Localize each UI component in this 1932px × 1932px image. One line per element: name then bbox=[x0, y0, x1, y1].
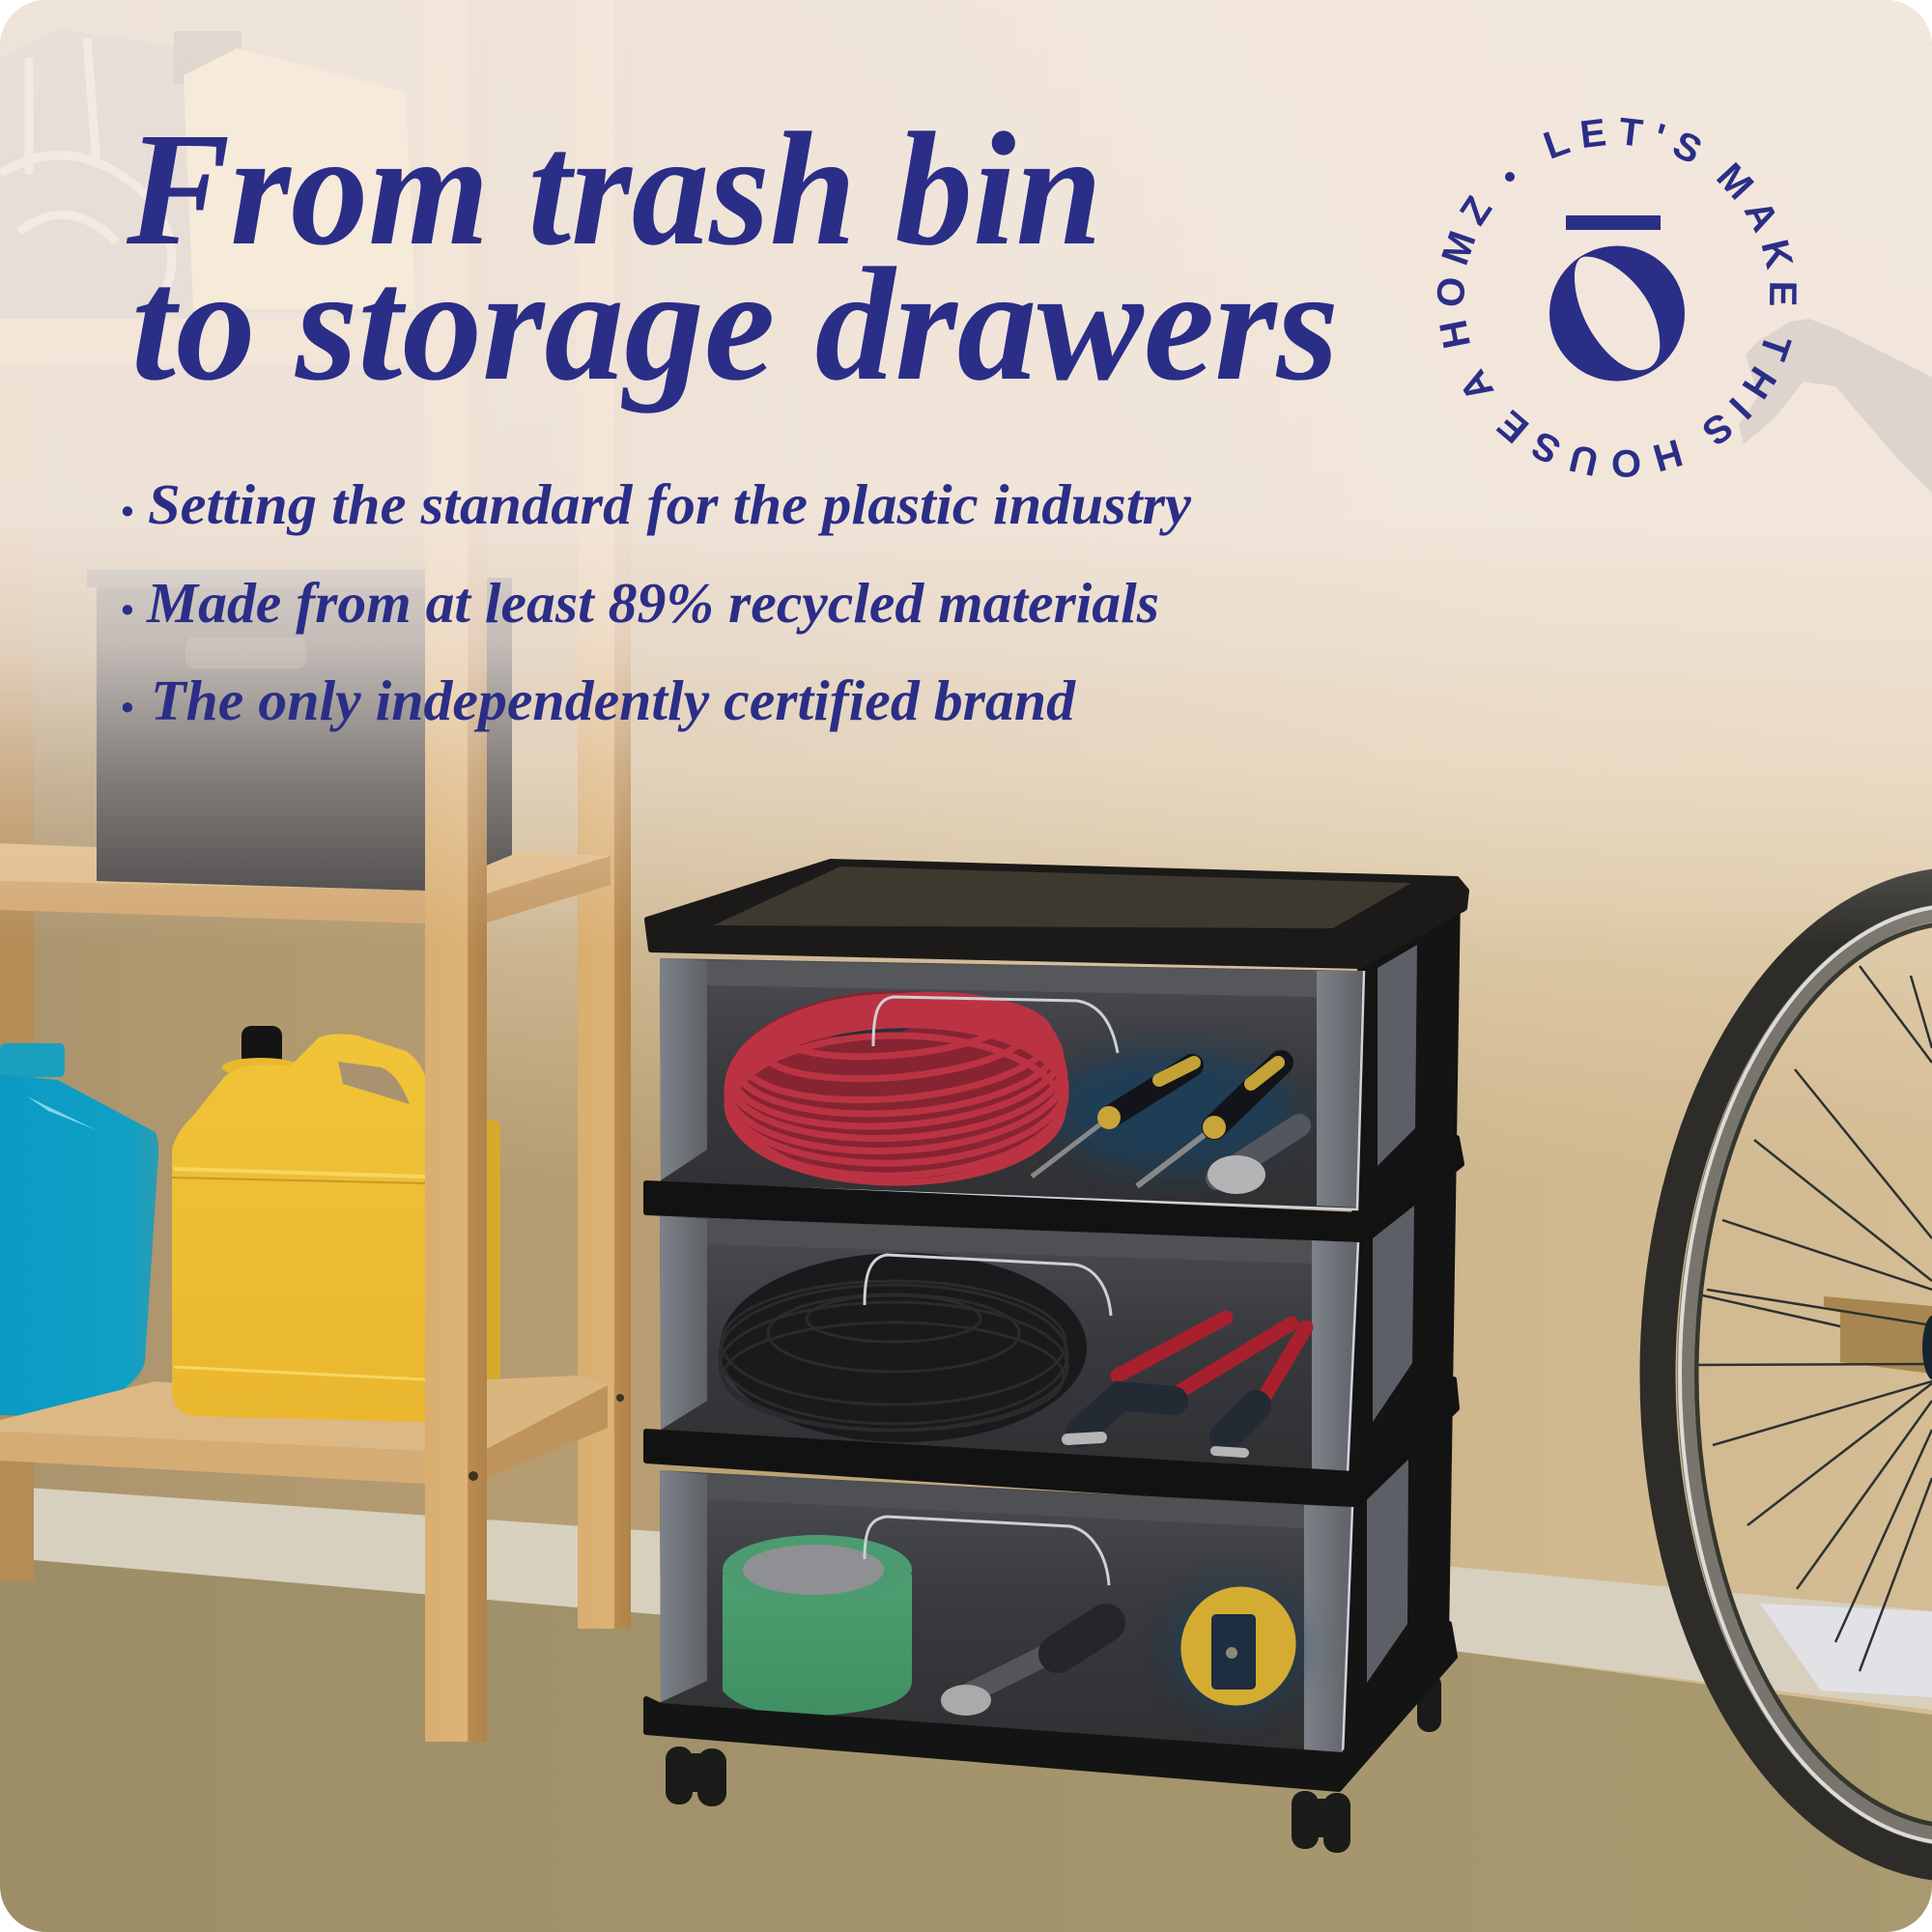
bicycle wheel bbox=[1658, 885, 1932, 1864]
bullet 3: • bbox=[121, 688, 133, 728]
base bbox=[646, 1624, 1455, 1789]
wheels front left bbox=[666, 1747, 726, 1806]
macron bar bbox=[1566, 215, 1661, 230]
separator 2 bbox=[646, 1379, 1457, 1507]
back right post bbox=[578, 582, 631, 1629]
green tape roll bbox=[723, 1535, 912, 1716]
bullet 2: • bbox=[121, 590, 133, 631]
bullet 1: Setting the standard for the plastic industry bbox=[148, 472, 1192, 536]
yellow jug bbox=[172, 1026, 500, 1422]
blue glow bbox=[1053, 1051, 1294, 1171]
bullet list bbox=[121, 472, 1192, 732]
blue glow bbox=[1174, 1584, 1299, 1710]
handle bbox=[873, 997, 1118, 1053]
logo badge bbox=[1437, 118, 1797, 477]
handle bbox=[865, 1255, 1111, 1316]
side window top bbox=[1378, 945, 1417, 1166]
floor bbox=[0, 1557, 1932, 1932]
tire bbox=[1658, 885, 1932, 1864]
lid bbox=[647, 862, 1466, 966]
screwdriver 2 bbox=[1137, 1063, 1281, 1186]
drawer 2 bbox=[660, 1216, 1358, 1474]
title line 2: to storage drawers bbox=[131, 235, 1339, 414]
ring dot bbox=[1505, 172, 1515, 182]
inner rim bbox=[1696, 923, 1932, 1827]
front shelf post bbox=[425, 578, 487, 1742]
title line 1: From trash bin bbox=[126, 99, 1102, 279]
back left post bbox=[0, 667, 34, 1582]
rim highlight bbox=[1680, 905, 1932, 1844]
tape measure bbox=[1161, 1568, 1316, 1724]
pliers bbox=[1067, 1318, 1292, 1439]
wrench bbox=[1208, 1125, 1299, 1194]
upper shelf front bbox=[0, 856, 611, 923]
rim bbox=[1686, 911, 1932, 1838]
side window middle bbox=[1373, 1206, 1414, 1422]
blue jug bbox=[0, 1043, 158, 1417]
handlebar silhouette bbox=[1739, 319, 1932, 493]
handle bbox=[865, 1517, 1109, 1585]
right side frame bbox=[1339, 894, 1461, 1789]
o mark bbox=[1549, 246, 1685, 382]
red cable coil bbox=[724, 984, 1068, 1184]
side window bottom bbox=[1367, 1458, 1408, 1683]
wheels front right bbox=[1292, 1791, 1350, 1853]
drawer 1 bbox=[660, 958, 1364, 1209]
white wall patch bbox=[1760, 1604, 1932, 1697]
bullet 3: The only independently certified brand bbox=[151, 668, 1077, 732]
cream fade overlay bbox=[0, 0, 1932, 947]
bullet 1: • bbox=[121, 492, 133, 532]
drawer 3 bbox=[660, 1470, 1352, 1755]
black cable coil bbox=[720, 1253, 1087, 1442]
large wrench bbox=[941, 1623, 1106, 1716]
lower shelf surface bbox=[0, 1381, 425, 1451]
hub bbox=[1922, 1315, 1932, 1380]
title bbox=[126, 99, 1339, 414]
bullet 2: Made from at least 89% recycled materials bbox=[146, 571, 1159, 635]
faint top shelf objects bbox=[0, 31, 242, 317]
shelf bolt bbox=[469, 1471, 478, 1481]
wheel back bbox=[1417, 1673, 1441, 1732]
wall highlight bbox=[487, 667, 1932, 1117]
storage drawers unit bbox=[646, 862, 1466, 1853]
separator 1 bbox=[646, 1138, 1462, 1243]
gray storage box bbox=[87, 570, 512, 891]
screwdriver 1 bbox=[1032, 1063, 1194, 1177]
circular tagline: LET'S MAKE THIS HOUSE A HOMZ bbox=[1437, 118, 1797, 477]
shelf bolt bbox=[616, 1394, 624, 1402]
lower shelf front bbox=[0, 1376, 608, 1484]
spokes bbox=[1698, 966, 1932, 1671]
upper shelf surface bbox=[0, 843, 611, 894]
baseboard bbox=[0, 1486, 1932, 1710]
wheel bracket bbox=[1824, 1296, 1932, 1374]
faint top shelf plank bbox=[0, 319, 425, 365]
second pliers bbox=[1215, 1327, 1306, 1453]
